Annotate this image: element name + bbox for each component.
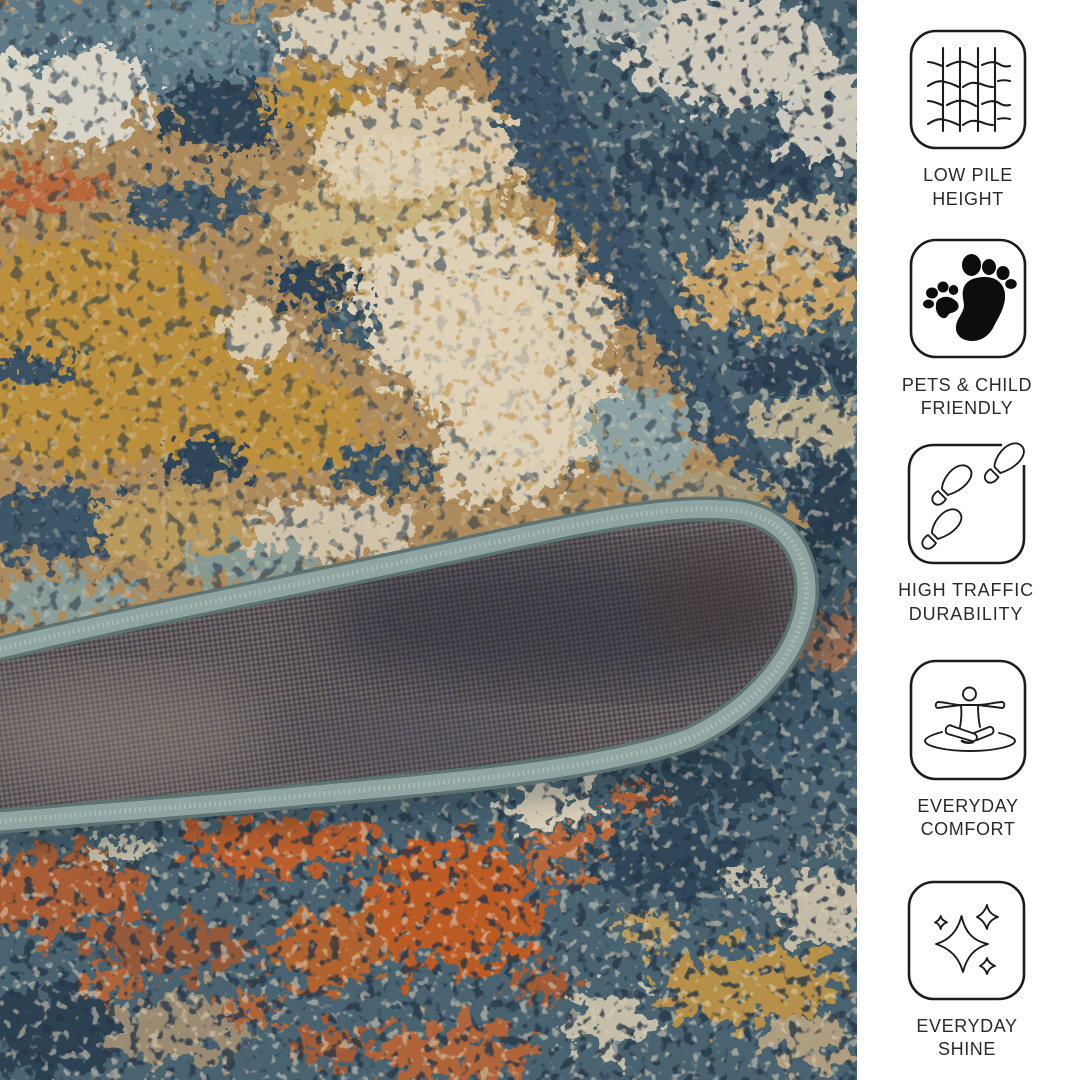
rug face: [0, 0, 857, 660]
feature: low pile height: [911, 31, 1025, 209]
feature: everyday shine: [909, 882, 1024, 1059]
feature icon column: [898, 30, 1034, 1059]
rug shadow: [0, 535, 827, 835]
rug underside: [0, 521, 794, 809]
icon: seated figure: [911, 661, 1025, 779]
label: everyday comfort: COMFORT: [921, 819, 1015, 839]
label: low pile height: HEIGHT: [932, 189, 1004, 209]
icon: paw and foot: [911, 240, 1025, 357]
icon: pile fibres: [911, 31, 1025, 148]
label: high traffic durability: HIGH TRAFFIC: [898, 580, 1034, 600]
icon: footprints: [909, 438, 1028, 563]
feature: everyday comfort: [911, 661, 1025, 839]
label: low pile height: LOW PILE: [923, 165, 1013, 185]
label: pets and child friendly: PETS & CHILD: [902, 375, 1032, 395]
rug binding edge: [0, 509, 806, 822]
label: high traffic durability: DURABILITY: [909, 604, 1023, 624]
icon: sparkles: [909, 882, 1024, 999]
dark rug edge strip: [470, 0, 830, 530]
rug face cream highlights: [320, 140, 590, 470]
feature: pets and child friendly: [902, 240, 1032, 418]
label: everyday comfort: EVERYDAY: [917, 796, 1019, 816]
label: pets and child friendly: FRIENDLY: [921, 398, 1013, 418]
label: everyday shine: SHINE: [938, 1039, 996, 1059]
feature: high traffic durability: [898, 438, 1034, 624]
photo: folded rug: [0, 0, 857, 1080]
label: everyday shine: EVERYDAY: [916, 1016, 1018, 1036]
